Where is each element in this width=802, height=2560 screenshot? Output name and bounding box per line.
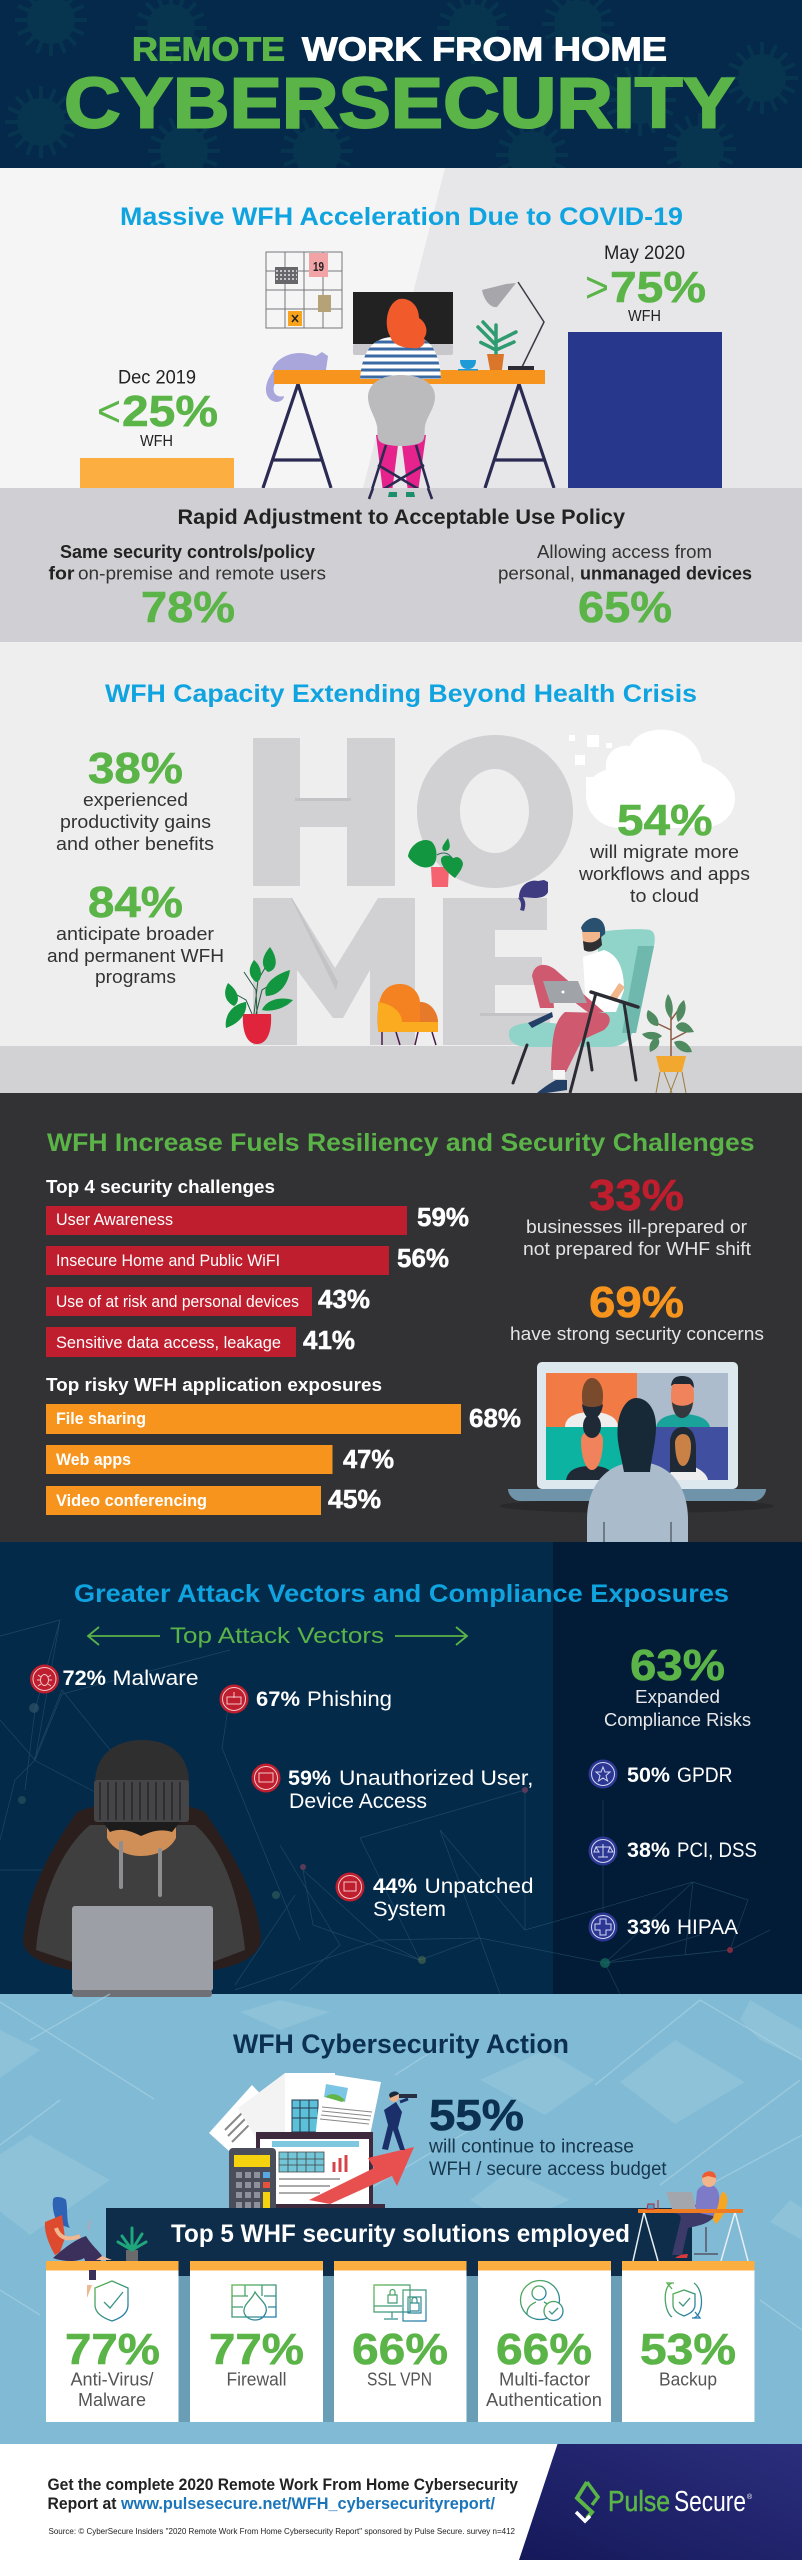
card: backup — [622, 2261, 754, 2422]
title: REMOTE — [132, 30, 285, 68]
heading: acceleration: Massive WFH Acceleration Due to COVID-19 — [120, 203, 683, 231]
bar: Dec 2019 — [80, 458, 234, 488]
card: SSL VPN — [334, 2261, 466, 2422]
icon: PCI — [588, 1836, 618, 1866]
illustration: red pot plant — [225, 947, 293, 1044]
stat: 38% productivity: 38% — [88, 744, 183, 793]
logo: Pulse Secure: Pulse — [608, 2486, 670, 2518]
stat: 54% cloud: will migrate more — [589, 842, 739, 862]
stat: 63% compliance: Expanded — [635, 1687, 720, 1707]
value: 77% — [209, 2325, 304, 2374]
heading: top attack vectors with arrows — [88, 1623, 467, 1648]
title: WORK FROM HOME — [302, 30, 667, 68]
call to action: Report at — [48, 2494, 117, 2513]
stat: 38% productivity — [56, 744, 214, 854]
stat: unmanaged devices: 65% — [578, 583, 672, 632]
icon: unpatched — [336, 1872, 364, 1902]
stat: Dec 2019: < — [97, 387, 121, 436]
stat: HIPAA — [627, 1916, 738, 1939]
stat: unpatched: System — [373, 1898, 446, 1921]
icon: shield check — [95, 2281, 128, 2321]
panel: attack vectors — [0, 1542, 802, 1994]
illustration: purple cat — [518, 880, 548, 911]
stat: May 2020: 75% — [610, 263, 706, 312]
stat: GDPR: 50% — [627, 1764, 670, 1787]
bar chart: application exposures: 45% — [328, 1484, 381, 1514]
stat: 55% budget: will continue to increase — [428, 2136, 634, 2158]
heading: risky exposures: Top risky WFH application exposures — [46, 1374, 382, 1395]
label — [70, 2370, 154, 2410]
stat: 38% productivity: productivity gains — [60, 812, 211, 832]
panel: WFH capacity — [0, 642, 802, 1094]
stat: 38% productivity: and other benefits — [56, 834, 214, 854]
call to action: Get the complete 2020 Remote Work From Home Cybersecurity — [48, 2475, 518, 2494]
illustration: video call laptop — [500, 1362, 774, 1542]
bar chart: application exposures: 68% — [469, 1403, 521, 1433]
stat: 38% productivity: experienced — [83, 790, 188, 810]
stat: malware: Malware — [112, 1667, 198, 1690]
bar chart: application exposures: Web apps — [56, 1450, 131, 1469]
title: CYBERSECURITY — [64, 64, 735, 144]
stat: 84% permanent programs: anticipate broader — [56, 924, 214, 944]
stat: same controls: 78% — [141, 583, 235, 632]
stat: malware — [62, 1667, 198, 1690]
bar chart: security challenges: 56% — [397, 1243, 449, 1273]
stat: Dec 2019 — [97, 368, 218, 450]
bar chart: security challenges: Sensitive data access, leakage — [56, 1333, 281, 1352]
illustration: orange armchair — [378, 984, 438, 1045]
bar chart: application exposures — [46, 1403, 521, 1515]
panel: cybersecurity action — [0, 1990, 802, 2444]
stat: same controls: for — [48, 564, 74, 584]
icon: GDPR — [588, 1760, 618, 1788]
stat: phishing — [256, 1688, 392, 1711]
bar chart: security challenges: Insecure Home and Public WiFI — [56, 1251, 280, 1270]
icon: malware — [30, 1664, 59, 1694]
label: Backup — [659, 2370, 717, 2390]
illustration: woman at monitor — [353, 292, 453, 499]
stat: unmanaged devices: unmanaged devices — [580, 564, 752, 584]
icon: firewall — [232, 2285, 276, 2320]
stat: 84% permanent programs: 84% — [88, 878, 183, 927]
illustration: wall grid: 19 — [313, 259, 324, 274]
call to action — [48, 2475, 518, 2513]
heading: capacity: WFH Capacity Extending Beyond Health Crisis — [105, 680, 697, 708]
illustration: wall grid — [266, 252, 342, 328]
stat: unpatched: Unpatched — [424, 1875, 534, 1898]
stat: 55% budget: 55% — [429, 2091, 524, 2140]
card: MFA — [478, 2261, 611, 2422]
stat: 54% cloud: 54% — [617, 796, 712, 845]
heading: resiliency: WFH Increase Fuels Resiliency and Security Challenges — [47, 1129, 754, 1157]
illustration: sitting woman — [45, 2197, 112, 2280]
logo: Pulse Secure: Secure — [674, 2486, 746, 2518]
bar chart: security challenges: 43% — [318, 1284, 370, 1314]
stat: PCI: 38% — [627, 1839, 670, 1862]
label: Multi-factor — [499, 2370, 590, 2390]
stat: 63% compliance: Compliance Risks — [604, 1710, 751, 1730]
label: SSL VPN — [367, 2370, 432, 2390]
stat: PCI — [627, 1839, 757, 1862]
stat: May 2020: May 2020 — [604, 243, 685, 264]
icon: unauthorized access — [252, 1764, 280, 1792]
label: Firewall — [226, 2370, 286, 2390]
banner: top 5 solutions: Top 5 WHF security solutions employed — [171, 2220, 630, 2248]
stat: Dec 2019: WFH — [140, 433, 173, 450]
heading: top 4 challenges: Top 4 security challenges — [46, 1176, 275, 1197]
stat: 63% compliance — [604, 1641, 751, 1730]
bar chart: security challenges: 41% — [303, 1325, 355, 1355]
logo: Pulse Secure — [576, 2482, 753, 2521]
stat: unauthorized access: Device Access — [289, 1790, 427, 1813]
stat: GDPR — [627, 1764, 732, 1787]
value: 66% — [496, 2325, 592, 2374]
stat: unauthorized access — [288, 1767, 534, 1813]
panel: acceptable use policy — [0, 488, 802, 642]
stat: same controls — [48, 542, 326, 632]
stat: phishing: Phishing — [307, 1688, 392, 1711]
bar: May 2020 — [568, 332, 722, 488]
bar chart: application exposures: File sharing — [56, 1409, 146, 1428]
illustration: desk — [263, 370, 554, 488]
icon: locked devices — [374, 2285, 426, 2321]
stat: unmanaged devices — [498, 542, 752, 632]
label: Authentication — [486, 2390, 602, 2410]
stat: 54% cloud: workflows and apps — [578, 864, 750, 884]
illustration: plant on banner — [118, 2228, 146, 2261]
logo: Pulse Secure: ® — [747, 2493, 753, 2501]
illustration: shelf plant — [408, 838, 463, 887]
panel: resiliency and challenges — [0, 1093, 802, 1542]
icon: user check — [520, 2280, 563, 2320]
stat: phishing: 67% — [256, 1688, 300, 1711]
stat: 84% permanent programs — [47, 878, 224, 987]
stat: 84% permanent programs: programs — [95, 967, 176, 987]
stat: unmanaged devices: personal, — [498, 564, 575, 584]
value: 53% — [640, 2325, 736, 2374]
heading: attack vectors: Greater Attack Vectors and Compliance Exposures — [74, 1580, 729, 1608]
stat: 69% concerns: 69% — [589, 1278, 684, 1327]
label — [486, 2370, 602, 2410]
banner: top 5 solutions — [106, 2208, 692, 2422]
stat: 33% not prepared: 33% — [589, 1171, 684, 1220]
stat: 55% budget — [428, 2091, 667, 2180]
header banner — [0, 0, 802, 191]
illustration: cat — [266, 352, 328, 402]
stat: 33% not prepared: businesses ill-prepared or — [526, 1217, 747, 1237]
bar chart: security challenges: 59% — [417, 1202, 469, 1232]
heading: top attack vectors with arrows: Top Attack Vectors — [170, 1623, 384, 1648]
stat: HIPAA: 33% — [627, 1916, 670, 1939]
illustration: plant and cup — [458, 322, 516, 370]
panel: WFH acceleration — [0, 168, 802, 499]
icon: HIPAA — [588, 1912, 618, 1942]
stat: same controls: on-premise and remote users — [78, 564, 326, 584]
source: Source: © CyberSecure Insiders "2020 Remote Work From Home Cybersecurity Report" sponsored by Pulse Secure. survey n=412 — [48, 2527, 516, 2536]
bar chart: security challenges: User Awareness — [56, 1210, 173, 1229]
stat: GDPR: GPDR — [677, 1764, 732, 1787]
stat: 33% not prepared: not prepared for WHF shift — [523, 1239, 751, 1259]
stat: May 2020 — [585, 243, 706, 325]
label: Malware — [78, 2390, 146, 2410]
illustration: desk man — [633, 2171, 748, 2261]
call to action: www.pulsesecure.net/WFH_cybersecurityreport/ — [120, 2494, 495, 2513]
illustration: cloud — [569, 730, 735, 828]
stat: 69% concerns — [510, 1278, 764, 1344]
stat: 69% concerns: have strong security concerns — [510, 1324, 764, 1344]
footer — [0, 2444, 802, 2560]
stat: unpatched: 44% — [373, 1875, 417, 1898]
illustration: documents, laptop, calculator and arrow — [209, 2073, 417, 2215]
stat: 63% compliance: 63% — [630, 1641, 725, 1690]
stat: malware: 72% — [62, 1667, 106, 1690]
stat: May 2020: WFH — [628, 308, 661, 325]
stat: HIPAA: HIPAA — [677, 1916, 738, 1939]
stat: May 2020: > — [585, 263, 609, 312]
stat: 84% permanent programs: and permanent WFH — [47, 946, 224, 966]
icon: phishing — [220, 1684, 248, 1714]
bar chart: application exposures: 47% — [343, 1444, 394, 1474]
card: firewall — [190, 2261, 323, 2422]
heading: acceptable use: Rapid Adjustment to Acceptable Use Policy — [178, 506, 625, 529]
bar chart: security challenges: Use of at risk and personal devices — [56, 1292, 299, 1311]
title — [64, 30, 735, 144]
stat: 54% cloud: to cloud — [630, 886, 699, 906]
label: Anti-Virus/ — [70, 2370, 154, 2390]
stat: 54% cloud — [578, 796, 750, 906]
value: 66% — [352, 2325, 448, 2374]
bar chart: security challenges — [46, 1202, 469, 1357]
stat: unauthorized access: 59% — [288, 1767, 331, 1790]
illustration: right pot plant — [642, 994, 694, 1093]
stat: PCI: PCI, DSS — [677, 1839, 757, 1862]
bar chart: application exposures: Video conferencing — [56, 1491, 207, 1510]
card: anti-virus — [46, 2261, 178, 2422]
stat: Dec 2019: Dec 2019 — [118, 368, 196, 388]
stat: unpatched — [373, 1875, 534, 1921]
stat: unauthorized access: Unauthorized User, — [339, 1767, 534, 1790]
heading: action: WFH Cybersecurity Action — [233, 2029, 569, 2059]
value: 77% — [65, 2325, 160, 2374]
illustration: lamp — [482, 282, 544, 370]
stat: 55% budget: WFH / secure access budget — [429, 2159, 667, 2180]
network background — [0, 1620, 770, 1994]
stat: 33% not prepared — [523, 1171, 751, 1259]
stat: Dec 2019: 25% — [122, 387, 218, 436]
stat: same controls: Same security controls/policy — [60, 542, 315, 562]
icon: shield cycle — [665, 2283, 702, 2318]
illustration: man in chair with laptop — [509, 918, 655, 1094]
stat: unmanaged devices: Allowing access from — [537, 542, 712, 562]
illustration: HOME letters — [253, 735, 573, 1045]
illustration: hacker — [23, 1740, 261, 1991]
